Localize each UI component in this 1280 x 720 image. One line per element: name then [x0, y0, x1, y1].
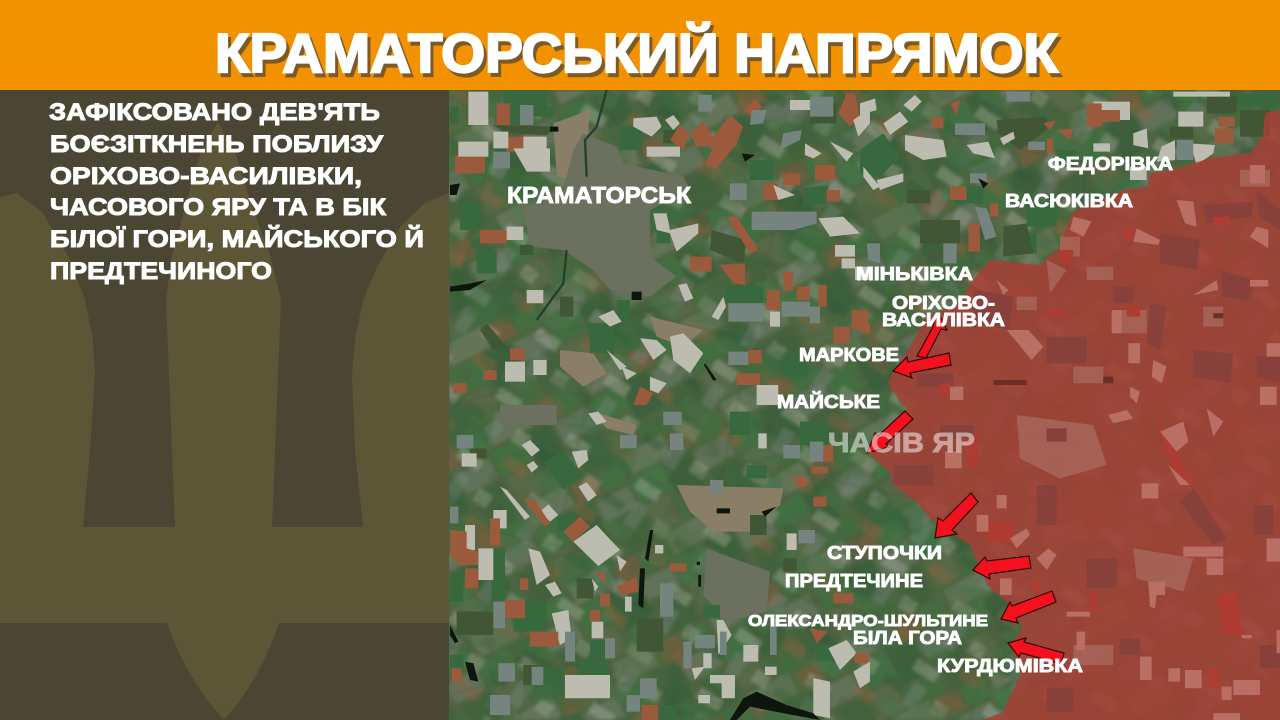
summary text block: ЗАФІКСОВАНО ДЕВ'ЯТЬ — [49, 99, 380, 126]
occupied territory fields: south — [893, 408, 1280, 720]
map texture: farmland tiles — [449, 90, 1280, 720]
label: Orikhovo-Vasylivka: ОРІХОВО- — [892, 293, 995, 313]
satellite map — [449, 90, 1280, 720]
arrow: Stupochky — [935, 493, 978, 538]
summary text block: БОЄЗІТКНЕНЬ ПОБЛИЗУ — [50, 131, 384, 158]
label: Chasiv Yar: ЧАСІВ ЯР — [828, 427, 975, 458]
summary text block: ЧАСОВОГО ЯРУ ТА В БІК — [50, 194, 386, 221]
label: Oleksandro-Shultyne: ОЛЕКСАНДРО-ШУЛЬТИНЕ — [748, 613, 988, 630]
map fields: north-east — [860, 92, 1277, 333]
label: Maiske: МАЙСЬКЕ — [777, 391, 880, 412]
arrow: Markove — [893, 353, 951, 378]
header banner — [0, 0, 1280, 90]
arrow: Chasiv Yar — [867, 411, 913, 453]
label: Stupochky: СТУПОЧКИ — [827, 542, 942, 563]
summary text block: ПРЕДТЕЧИНОГО — [50, 258, 272, 285]
summary text block: ОРІХОВО-ВАСИЛІВКИ, — [50, 163, 362, 190]
summary text block — [49, 99, 424, 285]
label: Fedorivka: ФЕДОРІВКА — [1048, 154, 1173, 174]
label: Kramatorsk: КРАМАТОРСЬК — [507, 182, 692, 208]
summary text block: БІЛОЇ ГОРИ, МАЙСЬКОГО Й — [50, 225, 424, 253]
label: Bila Hora: БІЛА ГОРА — [853, 627, 962, 648]
label: Orikhovo-Vasylivka: ВАСИЛІВКА — [882, 310, 1005, 330]
map fields: north-west — [450, 90, 870, 405]
arrow: Bila Hora — [1008, 638, 1064, 664]
map fields: south-west — [450, 405, 870, 720]
label: Kurdiumivka: КУРДЮМІВКА — [937, 655, 1083, 676]
title shadow: КРАМАТОРСЬКИЙ НАПРЯМОК — [218, 25, 1061, 88]
label: Minkivka: МІНЬКІВКА — [856, 264, 973, 284]
label: Markove: МАРКОВЕ — [799, 344, 899, 365]
label: Predtechyne: ПРЕДТЕЧИНЕ — [785, 570, 923, 591]
label: Orikhovo-Vasylivka — [882, 293, 1005, 330]
arrow: Orikhovo-Vasylivka — [917, 316, 947, 358]
occupied territory overlay — [867, 110, 1280, 720]
arrow: Oleksandro-Shultyne — [1001, 591, 1056, 623]
icon: trident emblem — [0, 122, 449, 720]
panel: left text background with trident — [0, 90, 449, 720]
label: Vasiukivka: ВАСЮКІВКА — [1005, 191, 1133, 211]
occupied territory fields: north — [917, 165, 1280, 405]
title: КРАМАТОРСЬКИЙ НАПРЯМОК — [215, 21, 1058, 84]
arrow: Predtechyne — [973, 556, 1031, 579]
